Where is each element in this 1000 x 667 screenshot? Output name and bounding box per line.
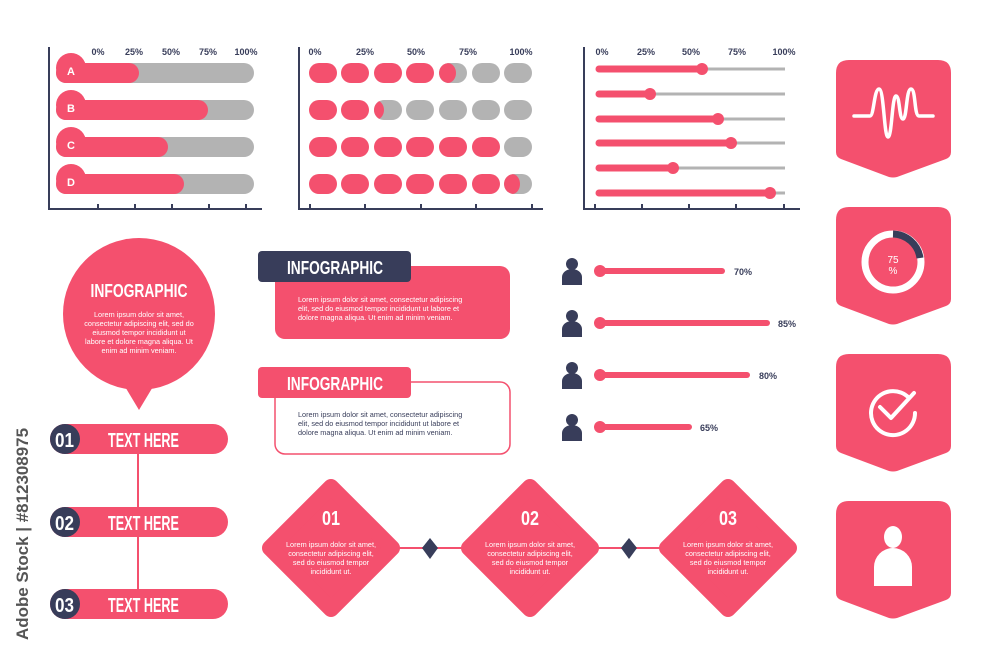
- text box: filled: INFOGRAPHIC: [287, 258, 383, 278]
- text box: filled: [258, 251, 510, 339]
- text box: filled: dolore magna aliqua. Ut enim ad minim veniam.: [298, 313, 453, 322]
- speech bubble: infographic: INFOGRAPHIC: [90, 281, 188, 301]
- chart: pill grid: 75%: [459, 47, 477, 57]
- chart: slider lines: [584, 47, 800, 209]
- text box: filled: Lorem ipsum dolor sit amet, consectetur adipiscing: [298, 295, 462, 304]
- numbered timeline: TEXT HERE: [108, 595, 179, 617]
- text box: outline: Lorem ipsum dolor sit amet, consectetur adipiscing: [298, 410, 462, 419]
- chart: lettered bar chart: C: [67, 140, 75, 152]
- chart: lettered bar chart: D: [67, 177, 75, 189]
- chart: slider lines: 100%: [772, 47, 796, 57]
- diamond process steps: [270, 487, 789, 609]
- diamond process steps: sed do eiusmod tempor: [690, 558, 767, 567]
- icon shield: 75% donut: [836, 207, 951, 324]
- diamond process steps: sed do eiusmod tempor: [492, 558, 569, 567]
- diamond process steps: 01: [322, 508, 340, 530]
- chart: lettered bar chart: [49, 47, 262, 209]
- speech bubble: infographic: eiusmod tempor incididunt ut: [92, 328, 186, 337]
- chart: lettered bar chart: 0%: [91, 47, 105, 57]
- chart: lettered bar chart: 100%: [234, 47, 258, 57]
- chart: lettered bar chart: 75%: [199, 47, 217, 57]
- diamond process steps: Lorem ipsum dolor sit amet,: [286, 540, 376, 549]
- chart: lettered bar chart: 50%: [162, 47, 180, 57]
- icon shield: 75% donut: 75: [887, 255, 899, 266]
- chart: pill grid: 50%: [407, 47, 425, 57]
- chart: pill grid: [299, 47, 543, 209]
- text box: outline: INFOGRAPHIC: [287, 374, 383, 394]
- watermark vertical text: Adobe Stock | #812308975: [13, 428, 32, 640]
- numbered timeline: 01: [55, 430, 74, 452]
- chart: pill grid: 25%: [356, 47, 374, 57]
- chart: lettered bar chart: A: [67, 66, 75, 78]
- diamond process steps: sed do eiusmod tempor: [293, 558, 370, 567]
- diamond process steps: 03: [719, 508, 737, 530]
- people percentage bars: 70%: [734, 267, 752, 277]
- chart: slider lines: 0%: [595, 47, 609, 57]
- chart: pill grid: 0%: [308, 47, 322, 57]
- chart: lettered bar chart: 25%: [125, 47, 143, 57]
- numbered timeline: TEXT HERE: [108, 430, 179, 452]
- diamond process steps: 02: [521, 508, 539, 530]
- diamond process steps: Lorem ipsum dolor sit amet,: [683, 540, 773, 549]
- speech bubble: infographic: Lorem ipsum dolor sit amet,: [94, 310, 184, 319]
- diamond process steps: consectetur adipiscing elit,: [685, 549, 771, 558]
- icon shield: person: [836, 501, 951, 618]
- numbered timeline: [50, 424, 228, 619]
- text box: filled: elit, sed do eiusmod tempor incididunt ut labore et: [298, 304, 459, 313]
- speech bubble: infographic: [63, 238, 215, 410]
- text box: outline: elit, sed do eiusmod tempor incididunt ut labore et: [298, 419, 459, 428]
- diamond process steps: incididunt ut.: [510, 567, 550, 576]
- speech bubble: infographic: labore et dolore magna aliqua. Ut: [85, 337, 193, 346]
- people percentage bars: 65%: [700, 423, 718, 433]
- text box: outline: dolore magna aliqua. Ut enim ad minim veniam.: [298, 428, 453, 437]
- text box: outline: [258, 367, 510, 454]
- diamond process steps: consectetur adipiscing elit,: [288, 549, 374, 558]
- people percentage bars: [562, 258, 796, 441]
- speech bubble: infographic: enim ad minim veniam.: [101, 346, 177, 355]
- people percentage bars: 85%: [778, 319, 796, 329]
- numbered timeline: TEXT HERE: [108, 513, 179, 535]
- chart: lettered bar chart: B: [67, 103, 75, 115]
- numbered timeline: 02: [55, 513, 74, 535]
- people percentage bars: 80%: [759, 371, 777, 381]
- diamond process steps: incididunt ut.: [708, 567, 748, 576]
- chart: pill grid: 100%: [509, 47, 533, 57]
- diamond process steps: Lorem ipsum dolor sit amet,: [485, 540, 575, 549]
- diamond process steps: consectetur adipiscing elit,: [487, 549, 573, 558]
- icon shield: heartbeat: [836, 60, 951, 178]
- chart: slider lines: 25%: [637, 47, 655, 57]
- speech bubble: infographic: consectetur adipiscing elit, sed do: [84, 319, 194, 328]
- icon shield: check: [836, 354, 951, 472]
- diamond process steps: incididunt ut.: [311, 567, 351, 576]
- chart: slider lines: 50%: [682, 47, 700, 57]
- icon shield: 75% donut: %: [889, 266, 898, 277]
- chart: slider lines: 75%: [728, 47, 746, 57]
- numbered timeline: 03: [55, 595, 74, 617]
